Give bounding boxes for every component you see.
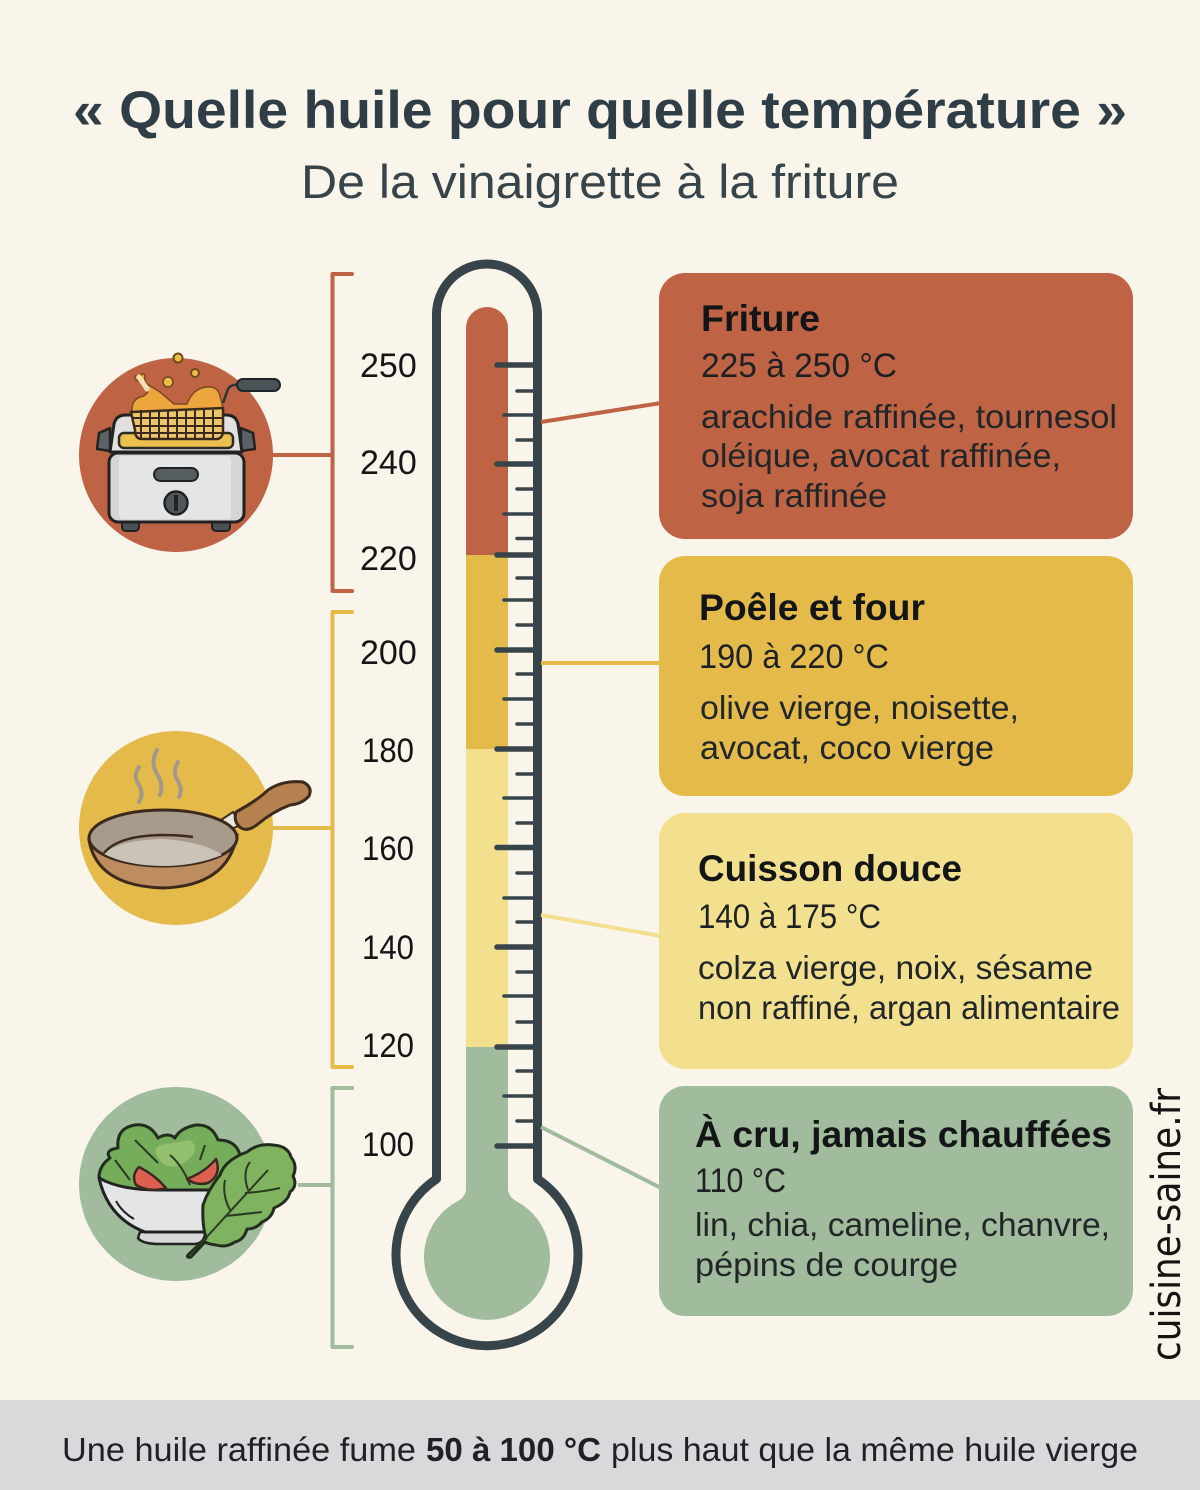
leader line: friture: [541, 403, 661, 422]
panel: poêle et four: avocat, coco vierge: [700, 729, 994, 766]
panel: friture: [659, 273, 1133, 539]
footer band: plus haut que la même huile vierge: [611, 1431, 1138, 1468]
connector: fryer to bracket: [272, 453, 332, 457]
panel: cuisson douce: Cuisson douce: [698, 848, 962, 889]
temperature scale numbers: 100: [362, 1126, 414, 1164]
temperature scale numbers: [360, 347, 417, 1164]
panel: à cru: lin, chia, cameline, chanvre,: [695, 1206, 1110, 1243]
leader line: à cru: [541, 1127, 661, 1188]
thermometer glass outline: [396, 264, 578, 1346]
bracket: poêle and cuisson douce range: [332, 612, 352, 1067]
thermometer tick marks: [497, 365, 534, 1146]
panel: friture: arachide raffinée, tournesol: [701, 398, 1117, 435]
panel: poêle et four: Poêle et four: [699, 587, 925, 628]
title: « Quelle huile pour quelle température »: [73, 81, 1127, 140]
watermark: site name: cuisine-saine.fr: [1144, 1088, 1190, 1361]
temperature scale numbers: 120: [362, 1027, 414, 1065]
subtitle: De la vinaigrette à la friture: [301, 155, 899, 208]
leader line: poêle et four: [541, 661, 661, 665]
temperature scale numbers: 200: [360, 634, 417, 672]
panel: cuisson douce: non raffiné, argan alimentaire: [698, 989, 1120, 1026]
panel: à cru: [659, 1086, 1133, 1316]
temperature scale numbers: 240: [360, 444, 417, 482]
bracket: friture range: [332, 274, 352, 591]
panel: à cru: 110 °C: [695, 1162, 786, 1200]
connector: salad to bracket: [298, 1183, 332, 1187]
panel: cuisson douce: colza vierge, noix, sésame: [698, 949, 1093, 986]
thermometer: [396, 264, 578, 1346]
thermometer liquid: [424, 307, 550, 1320]
panel: friture: soja raffinée: [701, 477, 887, 514]
panel: friture: oléique, avocat raffinée,: [701, 437, 1061, 474]
footer band: 50 à 100 °C: [426, 1431, 601, 1468]
temperature scale numbers: 250: [360, 347, 417, 385]
icon: deep fryer: [79, 354, 280, 552]
temperature scale numbers: 220: [360, 540, 417, 578]
bracket: à cru range: [332, 1088, 352, 1347]
footer band: Une huile raffinée fume: [62, 1431, 416, 1468]
footer band: [0, 1400, 1200, 1490]
panel: friture: 225 à 250 °C: [701, 347, 897, 385]
leader line: cuisson douce: [541, 915, 661, 936]
panel: cuisson douce: 140 à 175 °C: [698, 898, 881, 936]
panel: à cru: À cru, jamais chauffées: [695, 1114, 1112, 1155]
panel: à cru: pépins de courge: [695, 1246, 958, 1283]
icon: salad bowl: [79, 1087, 295, 1281]
panel: poêle et four: olive vierge, noisette,: [700, 689, 1019, 726]
icon: frying pan: [79, 731, 310, 925]
panel: poêle et four: [659, 556, 1133, 796]
temperature scale numbers: 180: [362, 732, 414, 770]
panel: friture: Friture: [701, 298, 820, 339]
temperature scale numbers: 160: [362, 830, 414, 868]
connector: pan to bracket: [272, 826, 332, 830]
panel: cuisson douce: [659, 813, 1133, 1069]
panel: poêle et four: 190 à 220 °C: [699, 638, 889, 676]
temperature scale numbers: 140: [362, 929, 414, 967]
